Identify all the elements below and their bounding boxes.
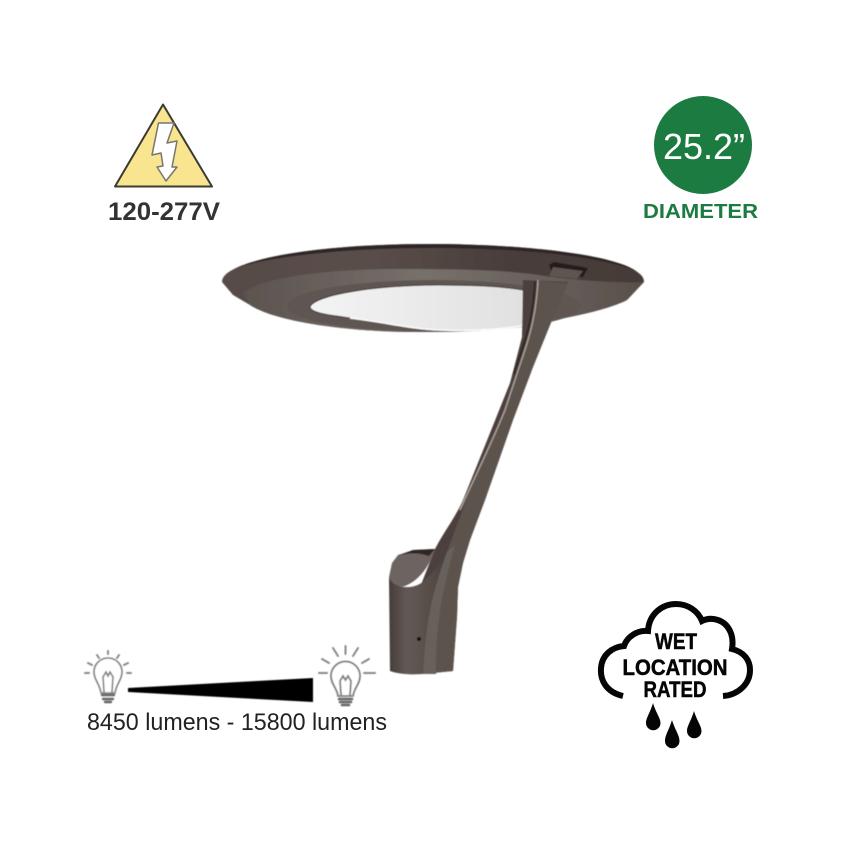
light fixture (222, 244, 644, 674)
wet location badge (601, 604, 750, 748)
lower ring (243, 269, 644, 332)
screw hole (417, 637, 421, 641)
green circle (654, 96, 752, 194)
icon: small light bulb (85, 651, 131, 702)
badge text (622, 629, 728, 702)
curved arm and base (389, 280, 568, 674)
arm light face (423, 281, 568, 674)
base cap (389, 549, 435, 586)
fixture disc (222, 244, 644, 332)
diameter badge (654, 96, 752, 194)
icon: rain drops (646, 703, 702, 748)
icon: cloud outline (601, 604, 750, 696)
arm highlight (460, 280, 538, 510)
icon: lightning bolt (152, 123, 177, 181)
diameter label: DIAMETER (643, 201, 759, 223)
mounting bracket (549, 262, 588, 279)
icon: warning triangle (115, 104, 212, 186)
lumens label: 8450 lumens - 15800 lumens (87, 709, 387, 736)
lens (310, 285, 528, 330)
diameter value: 25.2” (663, 126, 745, 167)
badge text: WET (655, 629, 697, 654)
voltage label: 120-277V (108, 198, 220, 226)
badge text: RATED (644, 677, 706, 702)
icon: large light bulb (319, 646, 375, 705)
arm (415, 280, 568, 674)
badge text: LOCATION (622, 655, 728, 680)
base cylinder (389, 550, 447, 674)
icon: wedge bar (128, 678, 313, 702)
lumen range scale (85, 646, 375, 705)
voltage warning icon (115, 104, 212, 186)
